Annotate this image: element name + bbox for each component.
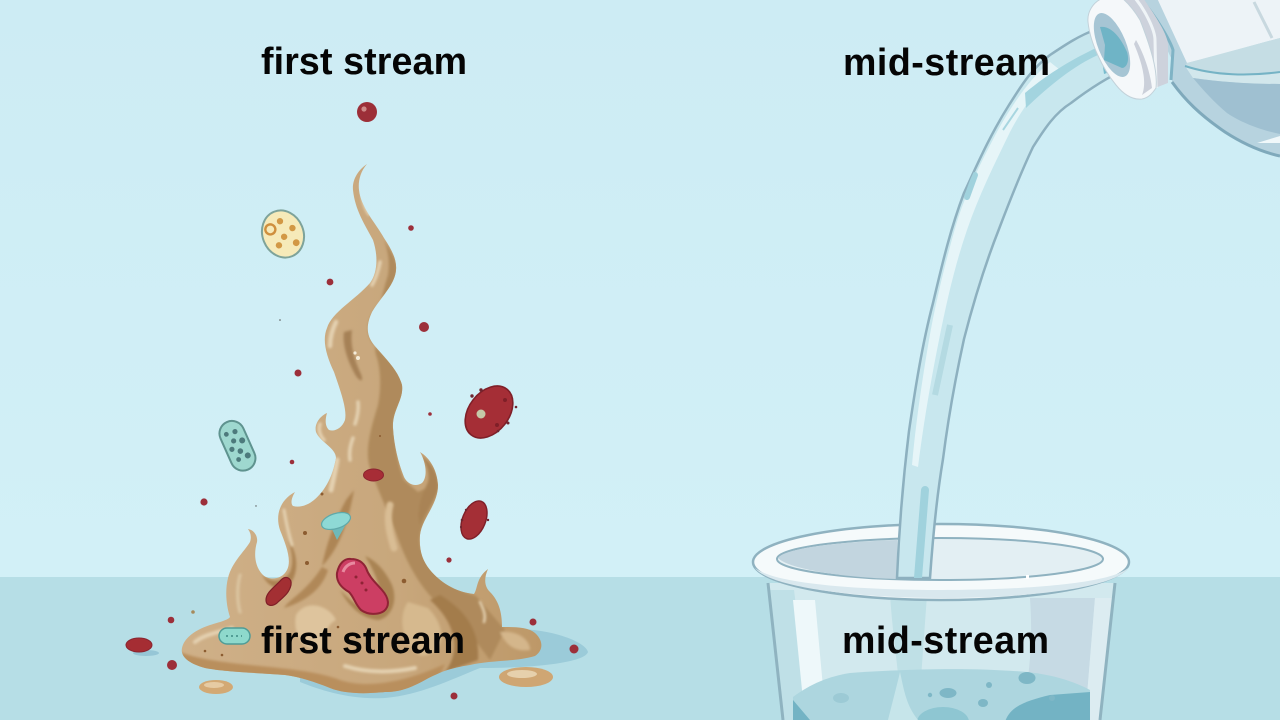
panel: first stream illustration	[126, 102, 588, 702]
pebble left	[199, 680, 233, 694]
blob shadow on floor	[300, 629, 588, 698]
microbe: crimson bean	[337, 559, 388, 614]
microbe: red rod on stream	[266, 578, 291, 605]
label: mid-stream bottom: mid-stream	[842, 619, 1049, 661]
microbe: red dot top	[357, 102, 377, 122]
brown stream mass	[180, 164, 541, 702]
microbe: teal capsule on puddle	[219, 628, 250, 644]
microbe: teal capsule	[215, 417, 259, 475]
microbe: red rod	[456, 497, 492, 543]
specks	[167, 225, 578, 699]
bottle body	[1140, 0, 1280, 156]
microbe: small red on stream	[364, 469, 384, 481]
label: mid-stream top: mid-stream	[843, 41, 1050, 83]
water in cup	[793, 669, 1090, 720]
water stream	[897, 30, 1128, 578]
microbe: red pill on floor	[126, 638, 159, 656]
cup body	[768, 583, 1115, 720]
bottle cap	[1086, 0, 1168, 99]
cup rim	[753, 524, 1129, 600]
panel: mid-stream illustration	[753, 0, 1280, 720]
floor	[0, 577, 1280, 720]
pebble right	[499, 667, 553, 687]
label: first stream top: first stream	[261, 40, 467, 82]
microbe: yellow oval	[255, 204, 311, 264]
label: first stream bottom: first stream	[261, 619, 465, 661]
microbe: red bean right	[455, 377, 523, 447]
microbe: teal embedded	[319, 509, 353, 540]
